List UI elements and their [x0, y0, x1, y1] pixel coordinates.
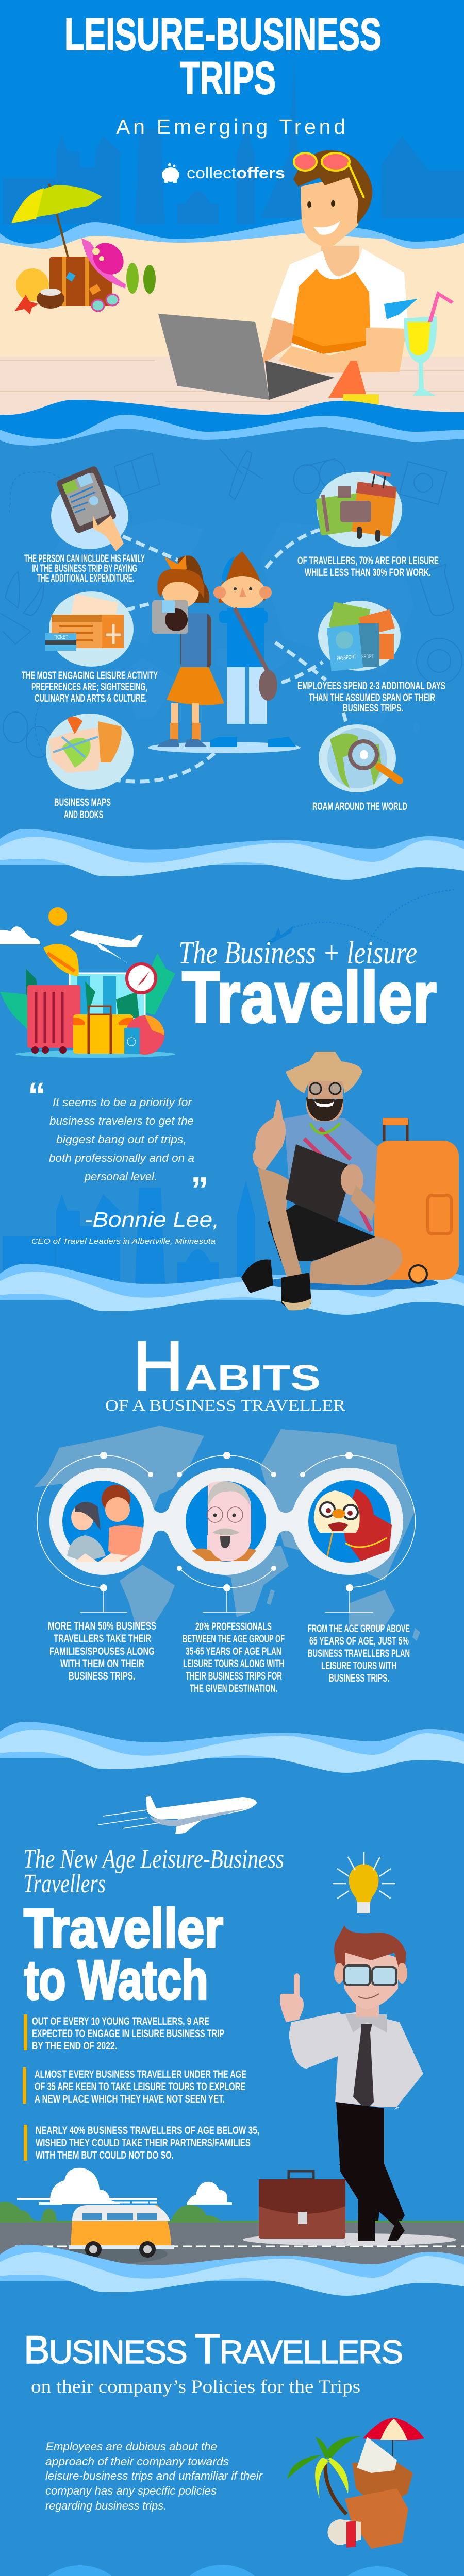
icon: palm tree and luggage stack: [287, 2418, 424, 2549]
text: 20 percent professionals: LEISURE TOURS ALONG WITH: [183, 1658, 284, 1670]
callout: nearly 40 percent: [24, 2125, 259, 2161]
callout: under 35: [23, 2067, 246, 2105]
heading: new age travellers: The New Age Leisure-Business: [23, 1844, 284, 1874]
stat: 59 percent: [170, 2565, 275, 2576]
table: [0, 357, 464, 421]
text: business maps: [54, 796, 111, 821]
subheading: on their company’s Policies for the Trips: [31, 2376, 360, 2397]
icon: light bulb: [333, 1852, 395, 1913]
attribution: -Bonnie Lee,: [85, 1208, 219, 1231]
text: leisure activities: CULINARY AND ARTS & CULTURE.: [35, 692, 147, 704]
girl: [152, 555, 224, 747]
portrait: couple: [67, 1485, 143, 1562]
icon: ball, suitcase, coconut: [14, 257, 112, 314]
text: over 50 percent: [48, 1620, 156, 1682]
plane silhouette: [266, 925, 294, 945]
character: seated traveller with suitcase: [241, 1052, 459, 1310]
panel: policy stats: [22, 2565, 433, 2576]
icon: flip flops and sunglasses: [92, 263, 156, 311]
title: [64, 8, 382, 104]
glasses-shaped frame: [49, 1468, 403, 1575]
quote text: [49, 1096, 194, 1183]
flight path: [294, 890, 454, 953]
callout: under 35: OF 35 ARE KEEN TO TAKE LEISURE TOURS TO EXPLORE: [35, 2081, 245, 2093]
text: leisure activities: THE MOST ENGAGING LEISURE ACTIVITY: [22, 670, 158, 682]
callout: under 35: ALMOST EVERY BUSINESS TRAVELLER UNDER THE AGE: [35, 2069, 246, 2080]
heading: business travellers: BUSINESS TRAVELLERS: [24, 2326, 403, 2372]
text: additional days: BUSINESS TRIPS.: [343, 702, 403, 714]
heading: traveller to watch: Traveller: [24, 1897, 223, 1959]
skyline silhouette: [3, 55, 464, 224]
heading: the business + leisure: The Business + leisure: [178, 936, 417, 971]
callout: under 35: A NEW PLACE WHICH THEY HAVE NOT SEEN YET.: [35, 2093, 225, 2105]
wave divider with traveller: [0, 1264, 464, 1315]
heading: traveller to watch: [24, 1897, 223, 2011]
icon: opening quote: “: [28, 1075, 46, 1115]
quote text: personal level.: [84, 1170, 157, 1183]
icon: money and passport: SPORT: [361, 654, 374, 660]
quote text: biggest bang out of trips,: [56, 1133, 187, 1146]
text: over 50 percent: FAMILIES/SPOUSES ALONG: [49, 1646, 155, 1657]
text: over 50 percent: WITH THEM ON THEIR: [60, 1658, 144, 1670]
text: 20 percent professionals: 20% PROFESSIONALS: [195, 1621, 272, 1633]
icon: travel illustration: [0, 907, 175, 1058]
text: family: IN THE BUSINESS TRIP BY PAYING: [32, 563, 137, 574]
paragraph: [45, 2440, 263, 2512]
title: TRIPS: [180, 52, 276, 104]
text: age above 65: 65 YEARS OF AGE, JUST 5%: [309, 1635, 409, 1647]
icon: briefcase and shadow: [243, 2164, 456, 2246]
callout: young travellers: BY THE END OF 2022.: [32, 2040, 117, 2052]
text: leisure activities: [22, 670, 158, 704]
beach waves and sand: [0, 219, 464, 361]
text: age above 65: [308, 1623, 410, 1684]
portrait: older professional: [192, 1481, 256, 1561]
icon: ticket: TICKET: [54, 634, 68, 640]
panel: hero header: [0, 0, 464, 428]
world map: [34, 1426, 420, 1641]
icon: tablet: [51, 465, 128, 551]
heading: habits: [133, 1327, 321, 1405]
paragraph: approach of their company towards: [45, 2455, 229, 2468]
text: roam the world: ROAM AROUND THE WORLD: [312, 801, 407, 812]
panel: trip tips: [22, 465, 445, 821]
panel: traveller to watch: [0, 1796, 464, 2268]
character: thinking businessman: [280, 1925, 423, 2241]
text: age above 65: BUSINESS TRIPS.: [329, 1672, 389, 1684]
text: family: THE ADDITIONAL EXPENDITURE.: [37, 572, 134, 584]
text: 70 percent leisure: [297, 555, 439, 579]
icon: money and passport: PASSPORT: [336, 654, 357, 662]
paragraph: regarding business trips.: [45, 2499, 167, 2512]
panel: habits of a business traveller: [34, 1327, 420, 1694]
logo: collectoffers: collect offers: [187, 164, 285, 182]
icon: beach umbrella: [11, 184, 102, 258]
text: over 50 percent: MORE THAN 50% BUSINESS: [48, 1620, 156, 1632]
laptop: [158, 314, 335, 400]
panel: the business + leisure traveller: [0, 890, 454, 1058]
text: family: [24, 553, 145, 584]
text: 20 percent professionals: 35-65 YEARS OF AGE PLAN: [186, 1646, 281, 1657]
paragraph: company has any specific policies: [45, 2484, 217, 2497]
text: 20 percent professionals: THEIR BUSINESS TRIPS FOR: [186, 1670, 282, 1682]
text: leisure activities: PREFERENCES ARE; SIGHTSEEING,: [31, 681, 147, 693]
wave divider: hero to tips: [0, 400, 464, 453]
icon: airplane: [98, 1796, 257, 1834]
text: 20 percent professionals: [183, 1621, 285, 1694]
subheading: OF A BUSINESS TRAVELLER: [105, 1396, 345, 1414]
text: additional days: [297, 680, 445, 714]
callout: young travellers: OUT OF EVERY 10 YOUNG TRAVELLERS, 9 ARE: [32, 2015, 209, 2027]
stat: 14 percent: [27, 2565, 132, 2576]
portrait: lion dance: [314, 1489, 392, 1561]
icon: map: [46, 714, 134, 790]
heading: traveller to watch: to Watch: [24, 1948, 208, 2011]
icon: globe and magnifier: [319, 724, 400, 792]
text: 20 percent professionals: THE GIVEN DESTINATION.: [190, 1683, 277, 1694]
callout: nearly 40 percent: NEARLY 40% BUSINESS TRAVELLERS OF AGE BELOW 35,: [36, 2125, 259, 2137]
heading: new age travellers: Travellers: [23, 1869, 106, 1899]
callout: nearly 40 percent: WITH THEM BUT COULD NOT DO SO.: [36, 2149, 174, 2161]
icon: closing quote: ”: [191, 1170, 209, 1210]
heading: habits: H: [133, 1327, 184, 1405]
faint map: [34, 519, 420, 734]
subtitle: An Emerging Trend: [116, 115, 345, 139]
text: over 50 percent: BUSINESS TRIPS.: [69, 1670, 135, 1682]
character: two young travellers: [148, 551, 301, 753]
paragraph: leisure-business trips and unfamiliar if their: [45, 2469, 263, 2482]
cocktail and fruit: [328, 291, 454, 404]
text: age above 65: LEISURE TOURS WITH: [321, 1660, 396, 1672]
heading: new age travellers: [23, 1844, 284, 1899]
text: business maps: BUSINESS MAPS: [54, 796, 111, 808]
text: over 50 percent: TRAVELLERS TAKE THEIR: [54, 1633, 151, 1645]
callout: young travellers: [24, 2014, 224, 2052]
stat: 27 percent: [325, 2566, 430, 2576]
text: family: THE PERSON CAN INCLUDE HIS FAMILY: [24, 553, 145, 565]
quote text: business travelers to get the: [49, 1114, 194, 1127]
wave divider with road: [0, 2245, 464, 2296]
background doodles: [0, 448, 462, 773]
skyline behind quote: [3, 1181, 255, 1283]
attribution: CEO of Travel Leaders in Albertville, Minnesota: [31, 1237, 216, 1246]
icon: money and passport: [318, 601, 401, 671]
icon: suitcases: [316, 472, 402, 547]
boy: [210, 551, 296, 747]
icon: ticket: [45, 591, 134, 667]
callout: nearly 40 percent: WISHED THEY COULD TAKE THEIR PARTNERS/FAMILIES: [36, 2137, 251, 2149]
panel: business travellers on policies: [24, 2326, 424, 2549]
text: business maps: AND BOOKS: [64, 809, 103, 821]
heading: habits: ABITS: [185, 1358, 321, 1398]
icon: van on road scene: [0, 2168, 464, 2268]
paragraph: Employees are dubious about the: [46, 2440, 217, 2453]
connector lines and dots: [37, 1452, 416, 1612]
dashed route lines: [115, 530, 346, 782]
character: man at laptop: [260, 150, 408, 373]
icon: pink hat: [81, 236, 130, 289]
quote text: both professionally and on a: [49, 1151, 194, 1164]
callout: young travellers: EXPECTED TO ENGAGE IN LEISURE BUSINESS TRIP: [32, 2028, 224, 2040]
attribution: [31, 1208, 219, 1246]
panel: quote: [28, 1075, 219, 1246]
wave divider: [0, 829, 464, 880]
text: 20 percent professionals: BETWEEN THE AGE GROUP OF: [183, 1633, 285, 1645]
quote text: It seems to be a priority for: [53, 1096, 193, 1109]
wave divider: [0, 1722, 464, 1773]
